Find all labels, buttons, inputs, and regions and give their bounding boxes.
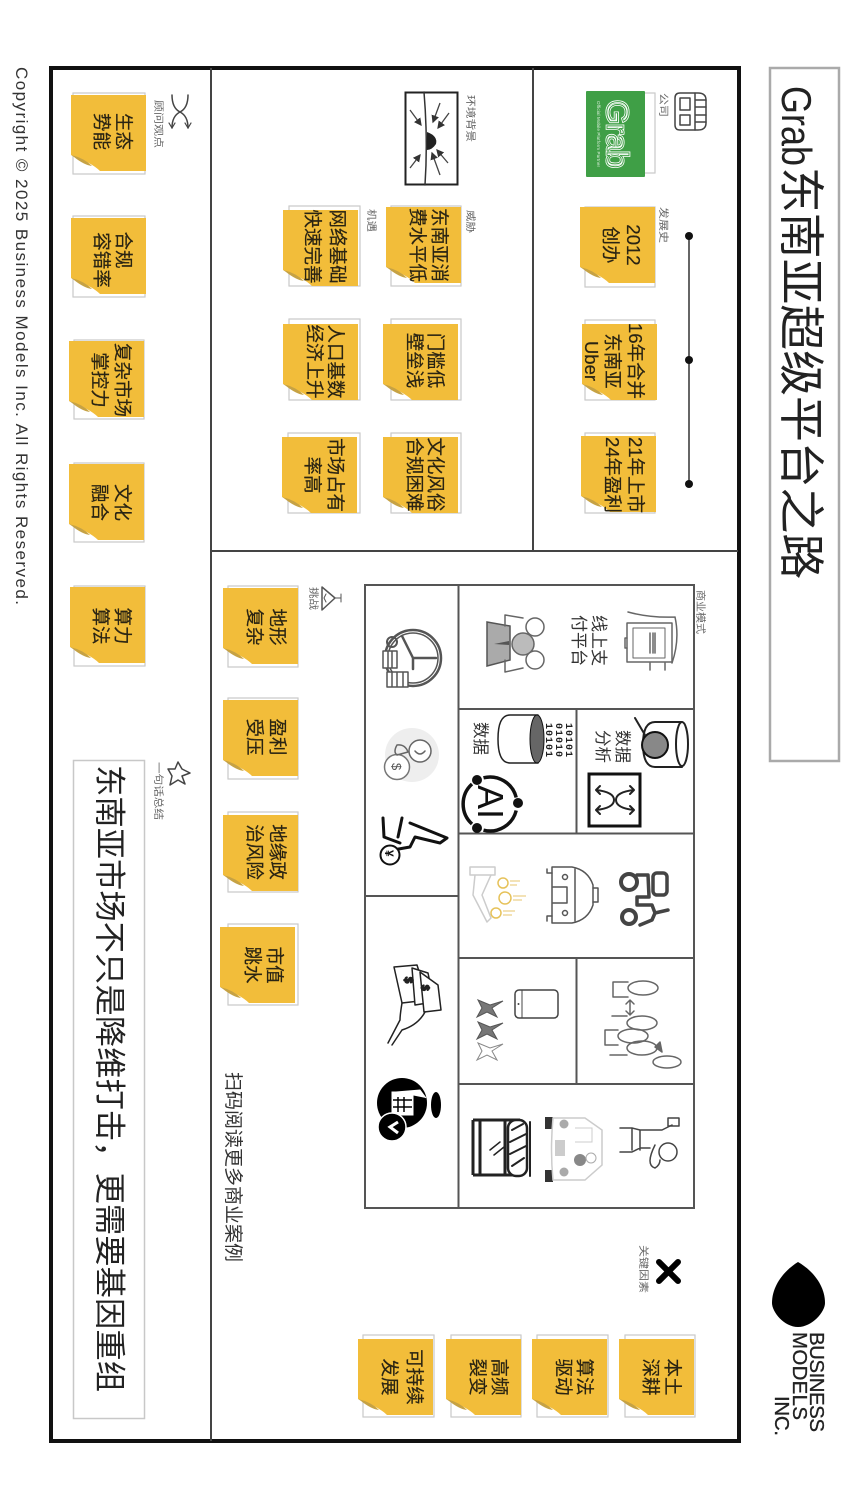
sticky: 21年上市: 21年上市: [625, 437, 646, 513]
logo: Business Models Inc: MODELS: [788, 1332, 811, 1420]
sticky: 合规容错率: 合规: [113, 231, 134, 269]
panel: development history: [580, 207, 693, 513]
sticky: 高频裂变: 裂变: [467, 1358, 488, 1396]
sticky: 市值跳水: [220, 924, 298, 1005]
sticky: 盈利受压: [223, 698, 298, 779]
icon: hand with coins: [470, 867, 526, 922]
icon: car top view: [545, 1117, 602, 1182]
sticky: 可持续发展: [358, 1335, 434, 1417]
cell: online payment platform: 付平台: [569, 615, 588, 666]
sticky: 21年上市: [581, 433, 656, 513]
sticky: 16年合并: Uber: [581, 341, 602, 381]
label: key factors: 关键因素: [637, 1245, 650, 1293]
sticky: 2012 创办: 创办: [600, 226, 621, 264]
sticky: 网络基础快速完善: 网络基础: [327, 209, 348, 284]
sticky: 东南亚消费水平低: [386, 206, 461, 286]
sticky: 算力算法: [70, 586, 145, 666]
sticky: 2012 创办: 2012: [623, 224, 644, 266]
icon: scooter: [621, 873, 668, 925]
sticky: 算力算法: 算法: [90, 607, 111, 645]
sticky: 文化风俗合规困难: 文化风俗: [425, 437, 446, 512]
icon: car: [547, 867, 598, 923]
panel: business model grid: [365, 585, 694, 1208]
sticky: 复杂市场掌控力: 掌控力: [89, 352, 110, 408]
sticky: 市值跳水: 跳水: [242, 946, 263, 984]
sticky: 可持续发展: 可持续: [404, 1349, 425, 1405]
label: opportunities: 机遇: [365, 209, 378, 232]
Grab logo card: Official Mobile Platform Partner: [596, 101, 601, 168]
sticky: 市场占有率高: 率高: [302, 456, 323, 494]
sticky: 算法驱动: [532, 1335, 608, 1417]
sticky: 地缘政治风险: 地缘政: [267, 824, 288, 880]
text: 数据分析: 数据: [613, 730, 632, 763]
icon: database cylinder: 10101: [562, 723, 573, 757]
icon: cross: [659, 1262, 678, 1281]
icon: people at laptop: [487, 615, 544, 672]
text: 线上支付平台: 线上支: [589, 615, 608, 666]
sticky: 合规容错率: 容错率: [91, 232, 112, 288]
sticky: 文化融合: 融合: [89, 484, 110, 521]
sticky: 21年上市: 24年盈利: [602, 437, 623, 513]
panel: environment: [282, 92, 477, 513]
sticky: 地缘政治风险: [223, 812, 298, 892]
icon: market pressure: [406, 92, 458, 185]
icon: database cylinder: [498, 715, 573, 763]
cell: data analysis: 分析: [593, 730, 612, 763]
sticky: 盈利受压: 盈利: [267, 718, 288, 756]
icon: person with phone: [620, 1118, 679, 1168]
text: 数据: 数据: [471, 722, 490, 755]
icon: POS terminal: [625, 612, 677, 670]
timeline: [685, 232, 693, 488]
copyright line: Copyright © 2025 Business Models Inc. All Rights Reserved.: [12, 67, 31, 605]
panel: company: [586, 91, 706, 177]
sticky: 市场占有率高: 市场占有: [325, 438, 346, 512]
sticky: 可持续发展: 发展: [379, 1358, 400, 1396]
icon: database cylinder: 10101: [542, 723, 553, 757]
cell: data: [463, 715, 573, 833]
icon: hand and yen coin: [380, 818, 447, 864]
sticky: 人口基数经济上升: 人口基数: [325, 324, 346, 399]
summary text box: [74, 760, 144, 1418]
icon: mountain flag: [322, 587, 341, 610]
sticky: 16年合并: 16年合并: [625, 323, 646, 399]
label: company: 公司: [657, 93, 668, 117]
sticky: 生态势能: 势能: [91, 113, 112, 150]
sticky: 文化融合: 文化: [112, 484, 133, 521]
sticky: 复杂市场掌控力: 复杂市场: [112, 343, 133, 417]
sticky: 东南亚消费水平低: 费水平低: [407, 208, 428, 282]
icon: database cylinder: 01010: [552, 723, 563, 757]
icon: store: [473, 1120, 530, 1176]
sticky: 高频裂变: [446, 1335, 521, 1417]
sticky: 高频裂变: 高频: [489, 1358, 510, 1396]
sticky: 本土深耕: 深耕: [640, 1358, 661, 1396]
sticky: 16年合并: [581, 320, 657, 400]
sticky: 地缘政治风险: 治风险: [244, 824, 265, 880]
sticky: 地形复杂: 地形: [267, 608, 288, 646]
sticky: 人口基数经济上升: 经济上升: [304, 324, 325, 399]
sticky: 文化风俗合规困难: [383, 433, 461, 513]
icon: cards in hand: [388, 965, 441, 1045]
sticky: 盈利受压: 受压: [244, 718, 265, 756]
label: business model: 商业模式: [694, 590, 707, 634]
sticky: 本土深耕: 本土: [662, 1358, 683, 1396]
icon: clock with coins: [383, 630, 441, 687]
sticky: 2012 创办: [580, 207, 655, 287]
logo: Business Models Inc: BUSINESS: [805, 1332, 828, 1432]
icon: money and smiley: $: [389, 763, 404, 771]
label: history: 发展史: [657, 207, 670, 243]
title: 东南亚超级平台之路: [775, 167, 826, 579]
Grab logo card: Grab: [600, 100, 635, 168]
panel: key factors: [358, 1245, 695, 1417]
label: challenges: 挑战: [307, 587, 320, 610]
sticky: 网络基础快速完善: 快速完善: [302, 209, 323, 284]
QR caption: 扫码阅读更多商业案例: [222, 1072, 244, 1262]
sticky: 生态势能: 生态: [113, 113, 134, 150]
sticky: 网络基础快速完善: [283, 206, 360, 286]
sticky: 生态势能: [71, 93, 146, 174]
sticky: 文化风俗合规困难: 合规困难: [404, 437, 425, 512]
icon: database magnifier: [635, 718, 688, 767]
sticky: 复杂市场掌控力: [69, 340, 144, 419]
logo: Business Models Inc: [770, 1262, 828, 1436]
sticky: 人口基数经济上升: [283, 319, 360, 400]
sticky: 门槛低壁垒浅: 壁垒浅: [404, 333, 425, 388]
icon: star: [168, 762, 190, 785]
title: Grab: [773, 86, 820, 166]
sticky: 门槛低壁垒浅: 门槛低: [425, 333, 446, 388]
sticky: 文化融合: [69, 463, 144, 542]
cell: online payment platform: [487, 612, 677, 672]
icon: cards in hand: $: [419, 985, 430, 991]
label: advisor views: 顾问观点: [152, 100, 165, 148]
label: threats: 威胁: [464, 210, 477, 233]
logo: Business Models Inc: INC.: [770, 1396, 793, 1436]
sticky: 合规容错率: [71, 216, 146, 297]
cell: mobility services: [470, 867, 668, 925]
Grab logo card: [586, 91, 655, 177]
icon: crossing arrows: [169, 95, 191, 128]
sticky: 地形复杂: 复杂: [244, 608, 265, 646]
icon: faces and arrow: [605, 981, 681, 1068]
icon: smartphone: [515, 990, 558, 1018]
panel: one-sentence summary: [74, 760, 190, 1418]
sticky: 算力算法: 算力: [112, 607, 133, 645]
icon: money and smiley: [384, 728, 439, 782]
panel: advisor views: [69, 93, 191, 666]
icon: star rating: [477, 1000, 503, 1060]
sticky: 市场占有率高: [282, 433, 360, 513]
sticky: 算法驱动: 驱动: [553, 1358, 574, 1396]
cell: community: [605, 981, 681, 1068]
label: environment background: 环境背景: [464, 95, 477, 142]
sticky: 地形复杂: [223, 586, 298, 667]
Grab logo card: Grab: [600, 100, 635, 168]
sticky: 本土深耕: [619, 1335, 695, 1417]
icon: cards in hand: $: [402, 977, 414, 983]
sticky: 算法驱动: 算法: [574, 1358, 595, 1396]
label: summary: 一句话总结: [152, 762, 165, 820]
cell: merchants, drivers, consumers: [473, 1117, 679, 1182]
panel: challenges: [220, 586, 341, 1262]
icon: storefront: [675, 93, 706, 130]
sticky: 16年合并: 东南亚: [602, 333, 623, 389]
main canvas frame: [51, 68, 739, 1441]
cell: data analysis: [589, 718, 688, 826]
sticky: 市值跳水: 市值: [264, 946, 285, 984]
sticky: 门槛低壁垒浅: [383, 319, 461, 400]
cell: ratings and phone: [477, 990, 558, 1060]
sticky: 东南亚消费水平低: 东南亚消: [429, 208, 450, 282]
icon: diverging arrows: [589, 774, 640, 826]
summary text box: 东南亚市场不只是降维打击，更需要基因重组: [92, 765, 127, 1392]
icon: money bag with commission: [377, 1078, 441, 1141]
icon: hand and yen coin: ¥: [382, 850, 396, 857]
icon: AI: AI: [470, 785, 511, 819]
title: [770, 68, 839, 761]
